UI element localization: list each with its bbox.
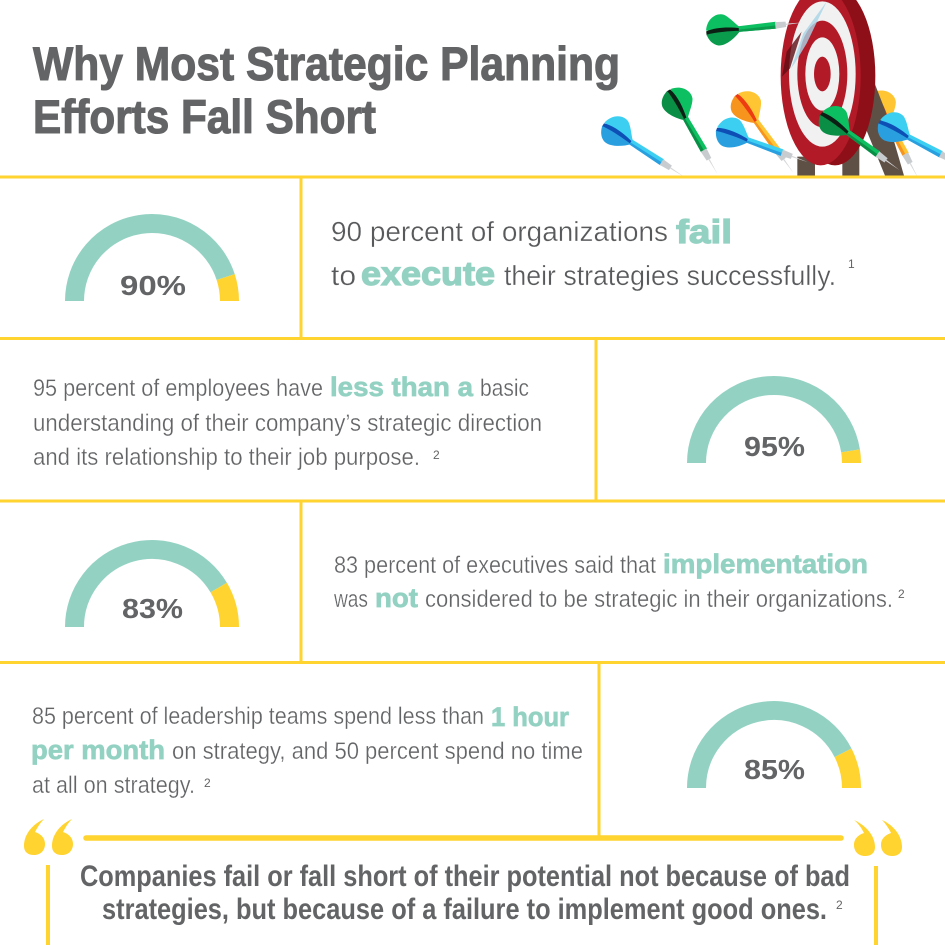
icon: orange dart	[725, 85, 807, 181]
text block: 90 percent statement: to	[331, 260, 356, 291]
panel: 90 percent	[74, 213, 855, 301]
text block: 95 percent statement: basic	[480, 375, 529, 402]
text block: 83 percent statement: 83 percent of executives said that	[334, 552, 656, 579]
text block: 85 percent statement: 85 percent of leadership teams spend less than	[32, 703, 484, 730]
icon: green dart on target	[813, 100, 909, 182]
panel: 95 percent	[33, 372, 852, 471]
text block: 90 percent statement: 90 percent of organizations	[331, 216, 668, 247]
icon: target board	[781, 0, 875, 165]
icon: target stand legs	[797, 80, 904, 176]
text block: 85 percent statement: per month	[31, 735, 165, 765]
text block: 83 percent statement: 2	[898, 587, 905, 601]
text block: 90 percent statement	[331, 213, 855, 292]
icon: blue dart right	[873, 107, 945, 180]
title: Efforts Fall Short	[33, 90, 376, 143]
icon: opening quote marks	[24, 819, 73, 855]
gauge: 90%: 90%	[120, 270, 186, 301]
text block: 95 percent statement	[33, 372, 542, 471]
panel: 83 percent	[74, 549, 905, 627]
icon: closing quote marks	[854, 820, 902, 856]
gauge: 90%	[74, 224, 230, 301]
text block: quote text: strategies, but because of a failure to implement good ones.	[102, 893, 827, 926]
text block: 85 percent statement: 1 hour	[491, 702, 569, 732]
gauge: 95%	[696, 385, 852, 463]
text block: 90 percent statement: fail	[676, 213, 732, 250]
text block: 85 percent statement: 2	[204, 776, 211, 790]
icon: green dart in flight	[705, 6, 804, 47]
text block: 83 percent statement: was	[333, 586, 368, 613]
callout: quote	[24, 819, 902, 945]
icon: blue dart left	[596, 110, 694, 189]
title: Why Most Strategic Planning	[33, 37, 620, 90]
text block: quote text: 2	[836, 898, 843, 912]
text block: 83 percent statement: implementation	[663, 549, 868, 579]
text block: 83 percent statement: not	[375, 583, 418, 613]
illustration: target and darts	[596, 0, 945, 189]
text block: quote text	[80, 860, 850, 926]
text block: 85 percent statement: on strategy, and 50 percent spend no time	[172, 738, 583, 765]
gauge: 83%	[74, 550, 230, 627]
text block: 95 percent statement: understanding of their company’s strategic direction	[33, 410, 542, 437]
gauge: 83%: 83%	[122, 593, 183, 624]
gauge: 85%	[696, 711, 852, 788]
text block: 83 percent statement	[333, 549, 905, 613]
text block: 83 percent statement: considered to be strategic in their organizations.	[425, 586, 893, 613]
icon: green dart	[657, 82, 732, 181]
text block: 90 percent statement: 1	[848, 257, 855, 271]
gauge: 85%: 85%	[744, 754, 805, 785]
text block: 85 percent statement: at all on strategy.	[32, 772, 195, 799]
text block: 95 percent statement: less than a	[330, 372, 474, 402]
title	[33, 37, 620, 143]
text block: 95 percent statement: and its relationship to their job purpose.	[33, 444, 420, 471]
icon: blue dart middle	[712, 113, 813, 175]
text block: 90 percent statement: their strategies successfully.	[504, 260, 836, 291]
text block: 95 percent statement: 2	[433, 448, 440, 462]
text block: 95 percent statement: 95 percent of employees have	[33, 375, 323, 402]
panel: 85 percent	[31, 702, 852, 799]
text block: 90 percent statement: execute	[361, 255, 495, 292]
text block: 85 percent statement	[31, 702, 583, 799]
gauge: 95%: 95%	[744, 431, 805, 462]
icon: dart behind the stand	[860, 85, 933, 185]
